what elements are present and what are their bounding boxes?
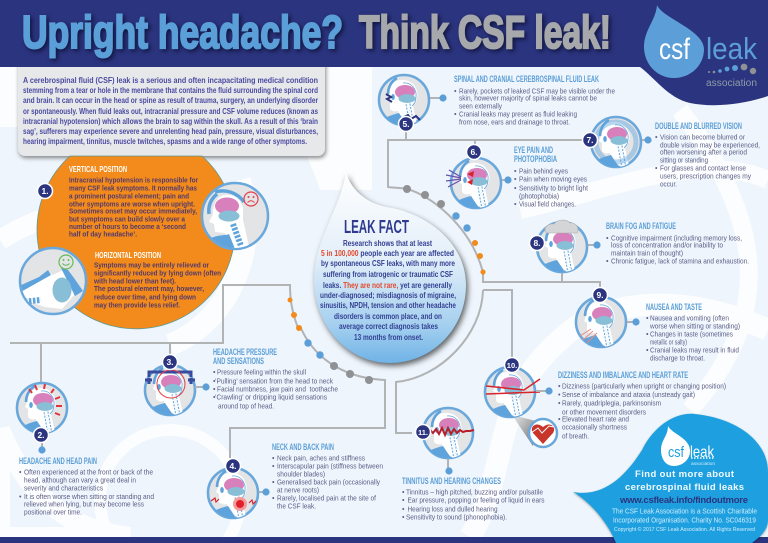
vertical position text: a prominent postural element; pain and: [69, 192, 189, 200]
heading: NECK AND BACK PAIN: [272, 442, 334, 452]
text: Nausea and vomiting (often: [650, 314, 729, 322]
badge 1: [38, 184, 52, 198]
text: Facial numbness, jaw pain and toothache: [217, 384, 338, 394]
symptom 7: double and blurred vision: [582, 117, 760, 188]
text: •: [213, 376, 216, 386]
text: occasionally shortness: [562, 422, 627, 432]
logo: small csf leak: csf: [668, 444, 685, 461]
text: ‘Pulling’ sensation from the head to neck: [215, 376, 333, 386]
leak fact panel: [314, 172, 466, 363]
text: [558, 382, 726, 440]
text: skin, however majority of spinal leaks cannot be: [459, 94, 597, 102]
horizontal position text: The postural element may, however,: [94, 284, 204, 293]
text: Vision can become blurred or: [660, 132, 746, 142]
text: •: [454, 86, 457, 96]
leak fact text: under-diagnosed; misdiagnosis of migraine,: [320, 291, 456, 300]
text: worse when sitting or standing): [649, 322, 740, 330]
text: Ear pressure, popping or feeling of liquid in ears: [408, 496, 545, 504]
text: of breath.: [562, 432, 589, 440]
symptom 3: headache pressure and sensations: [145, 347, 338, 418]
badge 8: [530, 236, 544, 250]
text: •: [272, 494, 275, 502]
text: •: [558, 382, 561, 390]
icon: leak from nose and spine: [379, 75, 447, 128]
icon: nausea: [576, 297, 640, 350]
text: •: [558, 390, 561, 399]
text: •: [402, 512, 405, 522]
text: [213, 368, 338, 410]
text: •: [213, 384, 216, 394]
vertical position text: many CSF leak symptoms. It normally has: [69, 184, 197, 192]
bottom band: [0, 537, 768, 543]
text: from nose, ears and drainage to throat.: [459, 118, 570, 126]
heading: AND SENSATIONS: [213, 356, 264, 366]
text: •: [272, 462, 275, 470]
badge 4: [226, 458, 240, 474]
text: Changes in taste (sometimes: [650, 330, 733, 338]
vertical position text: other symptoms are worse when upright.: [69, 200, 195, 208]
title: Think CSF leak!: [359, 6, 611, 58]
icon: dizziness: [485, 367, 553, 420]
vertical position text: number of hours to become a ‘second: [69, 222, 186, 231]
heading: PHOTOPHOBIA: [514, 154, 557, 164]
text: loss of concentration and/or inability to: [611, 240, 723, 250]
text: Chronic fatigue, lack of stamina and exhaustion.: [611, 256, 749, 266]
text: Dizziness (particularly when upright or changing position): [562, 382, 726, 390]
icon: heart rate: [529, 419, 557, 447]
badge 2: 2.: [37, 430, 45, 440]
intro panel: [18, 55, 325, 156]
text: •: [402, 504, 405, 514]
charity text: Copyright © 2017 CSF Leak Association. All Rights Reserved: [614, 526, 755, 533]
text: metallic or salty): [650, 338, 687, 346]
title: Upright headache?: [22, 6, 343, 58]
text: discharge to throat.: [650, 354, 705, 362]
logo: small csf leak: leak: [690, 444, 715, 461]
text: •: [213, 392, 216, 402]
text: seen externally: [459, 102, 502, 110]
badge 3: 3.: [166, 357, 174, 367]
intro panel: hearing impairment, tinnitus, muscle twitches, spasms and a wide range of other symptoms.: [23, 137, 307, 146]
intro panel: or spontaneously. When fluid leaks out, intracranial pressure and CSF volume reduces (known as: [23, 107, 318, 116]
heading: SPINAL AND CRANIAL CEREBROSPINAL FLUID LEAK: [454, 74, 599, 84]
text: •: [514, 166, 517, 176]
text: Pressure feeling within the skull: [217, 368, 306, 376]
intro panel: sag’, sufferers may experience severe and unrelenting head pain, pressure, visual disturbances,: [23, 127, 318, 136]
text: Pain behind eyes: [519, 166, 568, 176]
text: double vision may be experienced,: [660, 140, 760, 150]
intro panel: A cerebrospinal fluid (CSF) leak is a serious and often incapacitating medical condition: [23, 76, 318, 85]
text: Sense of imbalance and ataxia (unsteady gait): [562, 390, 695, 399]
text: •: [19, 468, 22, 476]
intro panel: stemming from a tear or hole in the membrane that contains the fluid surrounding the spinal cord: [23, 86, 318, 95]
text: [655, 132, 760, 188]
heading: [213, 347, 277, 366]
find out more text: www.csfleak.info/findoutmore: [619, 495, 748, 506]
text: Pain when moving eyes: [519, 174, 587, 184]
text: Tinnitus – high pitched, buzzing and/or pulsatile: [406, 488, 543, 496]
text: or other movement disorders: [562, 408, 646, 416]
leak fact text: leaks. They are not rare, yet are generally: [323, 281, 452, 290]
badge 7: 7.: [586, 135, 594, 145]
horizontal position text: with head lower than feet).: [93, 276, 176, 286]
text: •: [646, 330, 649, 338]
text: Rarely, localised pain at the site of: [277, 494, 376, 502]
badge 6: [466, 144, 482, 160]
leak fact text: by spontaneous CSF leaks, with many more: [321, 259, 455, 268]
text: [19, 468, 154, 516]
heading: HEADACHE AND HEAD PAIN: [19, 456, 97, 466]
logo: csf leak association: association: [706, 78, 757, 89]
text: sitting or standing: [660, 156, 708, 164]
text: Sensitivity to sound (phonophobia).: [406, 512, 507, 522]
icon: lying head, happy: [19, 248, 86, 314]
horizontal position text: significantly reduced by lying down (often: [94, 268, 221, 278]
icon: happy face: [59, 255, 73, 269]
symptom 2: headache and head pain: [17, 383, 154, 516]
text: Rarely, pockets of leaked CSF may be visible under the: [459, 86, 615, 96]
vertical position text: but symptoms can build slowly over a: [69, 214, 186, 224]
find out more text: Find out more about: [635, 469, 735, 480]
horizontal position heading: HORIZONTAL POSITION: [95, 250, 161, 260]
text: •: [514, 200, 517, 208]
heading: DIZZINESS AND IMBALANCE AND HEART RATE: [558, 370, 688, 380]
text: severity and characteristics: [24, 484, 103, 492]
text: •: [213, 368, 216, 376]
text: •: [655, 164, 658, 172]
find out more text: cerebrospinal fluid leaks: [625, 482, 744, 493]
text: Generalised back pain (occasionally: [277, 478, 380, 486]
leak fact text: sinusitis, NPDH, tension and other headache: [320, 301, 456, 310]
badge 5: [398, 116, 414, 132]
text: shoulder blades): [277, 470, 325, 478]
text: Interscapular pain (stiffness between: [277, 462, 383, 470]
badge 11: [416, 424, 430, 440]
badge 3: [162, 354, 178, 370]
text: •: [454, 110, 457, 118]
text: maintain train of thought): [611, 248, 683, 258]
icon: brain fog cloud: [537, 220, 601, 275]
leak fact text: Research shows that at least: [343, 239, 432, 248]
text: Cranial leaks may present as fluid leaking: [459, 110, 577, 118]
text: around top of head.: [218, 402, 274, 410]
call to action panel: [573, 414, 768, 543]
text: •: [606, 234, 609, 242]
callout wedge to heart: [512, 415, 536, 446]
symptom 4: neck and back pain: [208, 442, 383, 521]
leak fact text: 13 months from onset.: [354, 333, 423, 342]
badge 6: 6.: [470, 147, 478, 157]
badge 10: [504, 358, 520, 372]
charity text: The CSF Leak Association is a Scottish Charitable: [612, 508, 757, 516]
logo: small csf leak: association: [691, 461, 716, 466]
text: Visual field changes.: [519, 200, 576, 208]
connector lines and dots: [10, 128, 600, 458]
text: •: [19, 492, 22, 501]
text: •: [402, 496, 405, 504]
text: ‘Crawling’ or dripping liquid sensations: [215, 392, 327, 402]
charity text: [612, 508, 757, 533]
symptom 11: tinnitus and hearing changes: [402, 408, 545, 522]
heading: TINNITUS AND HEARING CHANGES: [402, 476, 501, 486]
text: positional over time.: [24, 508, 82, 516]
icon: upright head, sad: [201, 183, 268, 249]
text: users, prescription changes my: [660, 172, 751, 180]
text: •: [558, 398, 561, 408]
text: Sensitivity to bright light: [519, 184, 588, 192]
icon: neck and back pain: [208, 468, 270, 521]
header band: [0, 0, 768, 105]
badge 5: 5.: [402, 119, 410, 129]
text: Neck pain, aches and stiffness: [277, 454, 365, 462]
text: head, although can vary a great deal in: [24, 476, 136, 484]
horizontal position text: [93, 260, 221, 310]
horizontal position text: reduce over time, and lying down: [94, 292, 196, 302]
symptom 6: eye pain and photophobia: [446, 144, 588, 211]
horizontal position text: may then provide less relief.: [94, 300, 180, 310]
charity text: Incorporated Organisation. Charity No. SC046319: [613, 518, 756, 524]
symptom 10: dizziness, imbalance, heart rate: [485, 358, 726, 447]
leak fact text: suffering from iatrogenic or traumatic CSF: [323, 270, 453, 279]
symptom 5: spinal and cranial leak: [379, 74, 615, 132]
leak fact heading: LEAK FACT: [344, 217, 409, 237]
text: at nerve roots): [277, 486, 319, 494]
horizontal position text: Symptoms may be entirely relieved or: [94, 260, 209, 270]
text: [272, 454, 383, 510]
icon: sad face: [244, 192, 258, 206]
logo: small csf leak: [661, 426, 716, 466]
logo: csf leak association: [644, 5, 757, 89]
logo: csf leak association: csf: [659, 33, 691, 66]
vertical position heading: VERTICAL POSITION: [69, 164, 127, 174]
text: [606, 234, 749, 266]
icon: head pain: [17, 383, 67, 454]
leak fact text: average correct diagnosis takes: [339, 322, 438, 331]
intro panel: and brain. It can occur in the head or spine as result of trauma, surgery, an underlying disorder: [23, 96, 319, 105]
text: Hearing loss and dulled hearing: [408, 504, 498, 514]
badge 1: 1.: [41, 186, 49, 196]
badge 9: [592, 288, 608, 302]
badge 10: 10.: [507, 361, 517, 370]
text: [646, 314, 740, 362]
text: (photophobia): [519, 192, 559, 200]
icon: blurred vision: [591, 117, 652, 170]
badge 9: 9.: [596, 290, 604, 300]
icon: clamp on head: [145, 365, 210, 418]
text: Cognitive impairment (including memory loss,: [611, 234, 742, 242]
icon: tinnitus: [423, 408, 474, 475]
badge 7: [582, 132, 598, 148]
heading: NAUSEA AND TASTE: [646, 302, 702, 312]
vertical position text: Intracranial hypotension is responsible for: [69, 176, 198, 184]
leak fact text: [320, 239, 456, 342]
symptom 9: nausea and taste: [576, 288, 740, 362]
text: •: [646, 346, 649, 354]
text: [402, 488, 545, 522]
vertical position text: Sometimes onset may occur immediately,: [69, 206, 197, 216]
text: [514, 166, 588, 208]
intro panel: intracranial hypotension) which allows the brain to sag within the skull. As a result of this ‘brain: [23, 117, 318, 126]
text: Often experienced at the front or back of the: [24, 468, 153, 476]
logo: csf leak association: leak: [706, 31, 757, 66]
text: •: [655, 132, 658, 142]
heading: BRAIN FOG AND FATIGUE: [606, 221, 676, 231]
text: •: [606, 256, 609, 266]
heading: EYE PAIN AND: [514, 145, 553, 155]
heading: [514, 145, 557, 164]
leak fact text: 5 in 100,000 people each year are affected: [321, 249, 454, 258]
badge 8: 8.: [533, 238, 541, 248]
text: often worsening after a period: [660, 148, 747, 156]
text: It is often worse when sitting or standing and: [24, 492, 154, 501]
icon: eye pain: [446, 158, 512, 211]
badge 4: 4.: [229, 461, 237, 471]
text: Rarely, quadriplegia, parkinsonism: [562, 398, 661, 408]
text: Elevated heart rate and: [562, 414, 629, 424]
badge 11: 11.: [418, 428, 428, 437]
heading: HEADACHE PRESSURE: [213, 347, 277, 357]
text: •: [272, 478, 275, 486]
text: •: [402, 488, 405, 496]
text: For glasses and contact lense: [660, 164, 746, 172]
text: the CSF leak.: [277, 502, 316, 510]
text: •: [514, 184, 517, 192]
text: •: [272, 454, 275, 462]
find out more text: [619, 469, 748, 506]
text: •: [558, 414, 561, 424]
orange panel: postural symptoms: [37, 156, 235, 329]
text: •: [646, 314, 649, 322]
text: [454, 86, 615, 126]
text: occur.: [660, 180, 677, 188]
text: relieved when lying, but may become less: [24, 500, 144, 508]
vertical position text: half of day headache’.: [69, 230, 137, 238]
text: •: [514, 174, 517, 184]
symptom 8: brain fog and fatigue: [530, 220, 749, 275]
text: Cranial leaks may result in fluid: [650, 346, 739, 354]
vertical position text: [69, 176, 198, 238]
leak fact text: disorders is common place, and on: [334, 312, 442, 321]
